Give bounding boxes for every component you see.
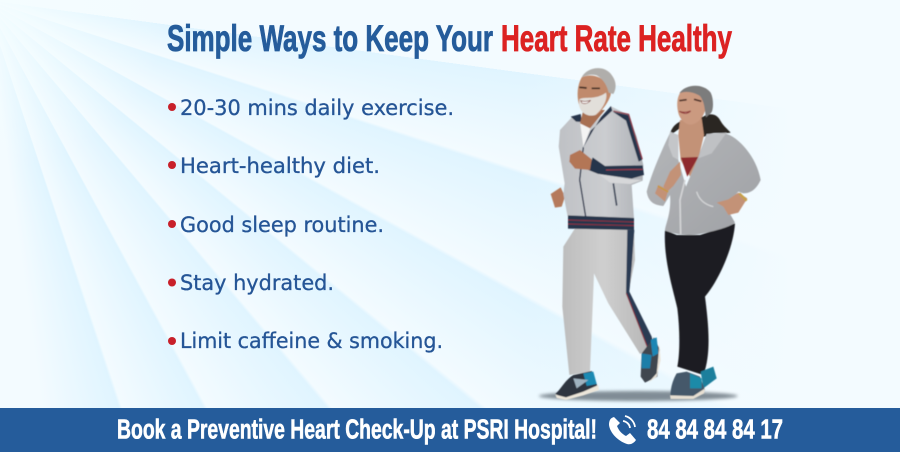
face <box>578 75 611 115</box>
title: Heart Rate Healthy <box>501 18 732 59</box>
bullet: sleep: Good sleep routine. <box>180 213 384 237</box>
beard <box>579 93 606 116</box>
neck and chest <box>678 118 704 177</box>
hair <box>679 86 713 117</box>
ground shadow <box>539 391 738 401</box>
neck <box>580 110 605 128</box>
bullet: hydration: Stay hydrated. <box>180 271 334 295</box>
bullet: diet: Heart-healthy diet. <box>180 154 380 178</box>
phone number: 84 84 84 84 17 <box>647 414 783 444</box>
icon: phone <box>609 416 636 444</box>
woman <box>647 86 761 399</box>
man <box>551 68 661 400</box>
ponytail <box>670 114 731 137</box>
photo: couple jogging <box>539 68 761 401</box>
bullet: caffeine and smoking: Limit caffeine & smoking. <box>180 329 443 353</box>
call to action: Book a Preventive Heart Check-Up at PSRI Hospital! <box>117 414 597 444</box>
bullet list <box>168 96 454 353</box>
face <box>677 91 706 125</box>
footer bar <box>0 408 900 452</box>
title: Simple Ways to Keep Your <box>167 18 493 59</box>
bullet: exercise: 20-30 mins daily exercise. <box>180 96 454 120</box>
hair <box>582 68 616 94</box>
